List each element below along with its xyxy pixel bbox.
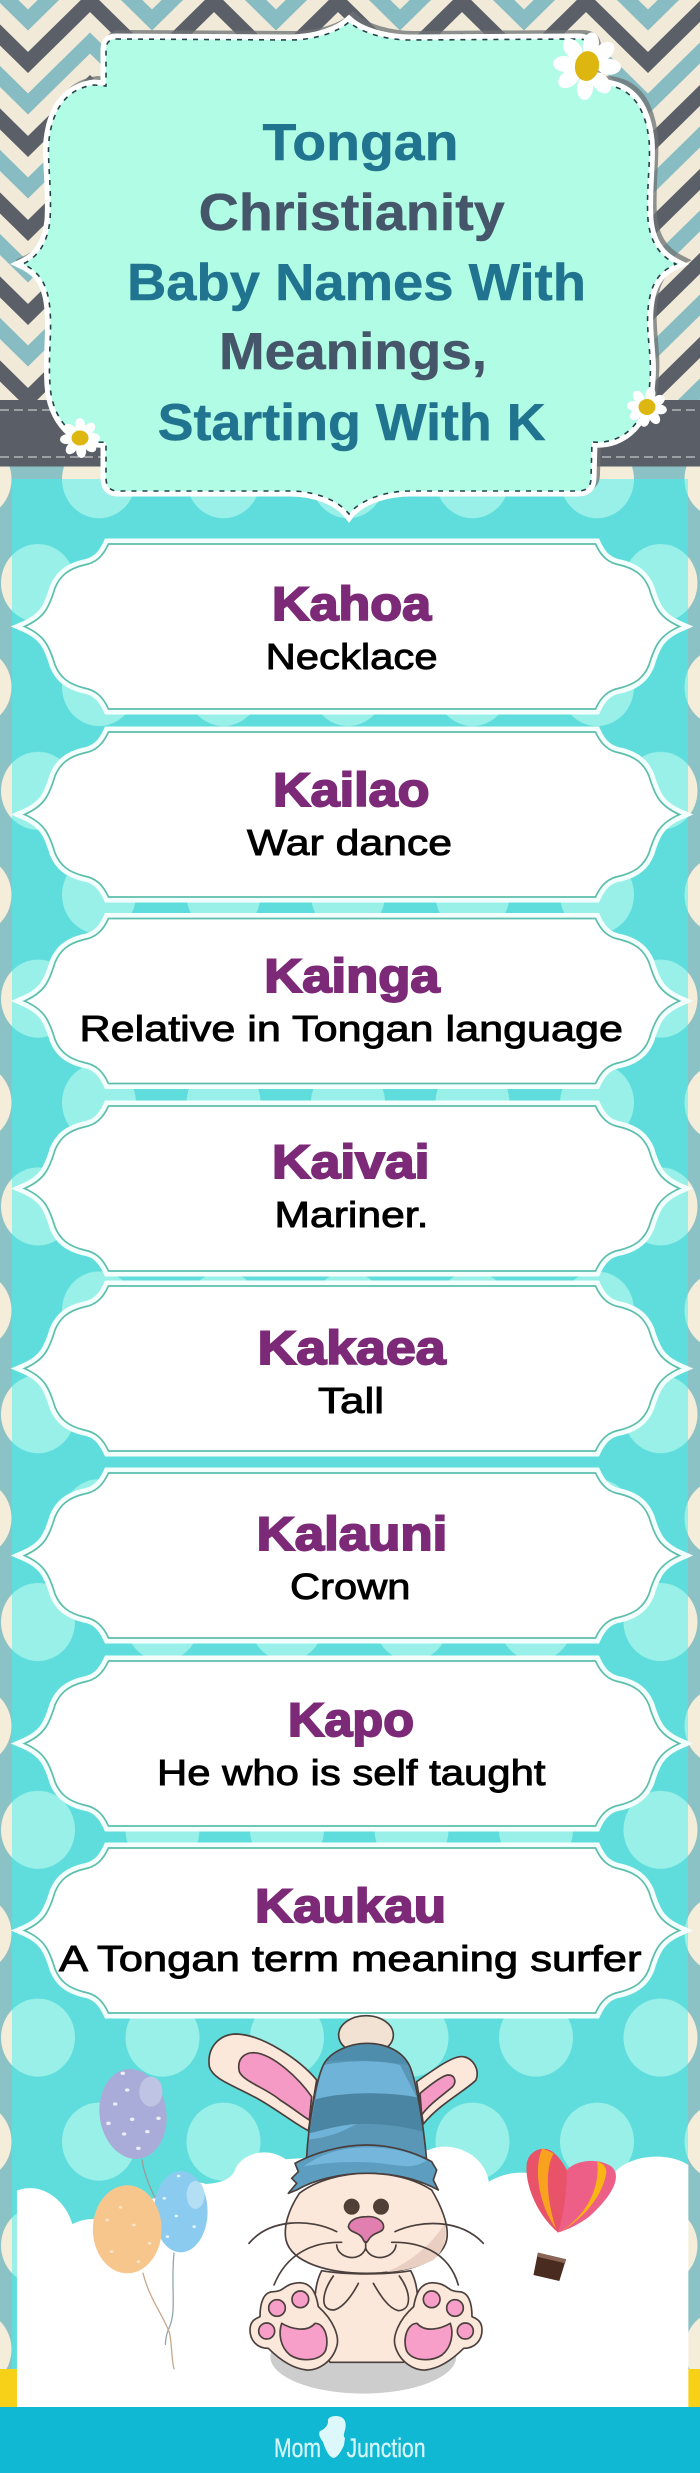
nose [348,2217,384,2242]
bunny lower: body and feet [250,2271,482,2370]
left foot [250,2283,338,2370]
name card: Kahoa [24,544,680,709]
logo: mother and child icon [319,2416,346,2458]
name card: Kaivai: Kaivai [272,1135,430,1188]
head [285,2173,447,2273]
name card: Kakaea: Tall [318,1380,384,1421]
title text: Starting With K [158,394,546,452]
left ear [209,2034,317,2131]
name card: Kailao [24,732,680,897]
icon: daisy lower right [627,386,668,428]
icon: daisy top right [552,31,621,101]
body [315,2271,418,2362]
name card: Kaivai [24,1106,680,1271]
pompom [339,2016,393,2054]
polka dot panel background [0,466,700,2407]
balloon strings [142,2159,174,2369]
title text: Baby Names With [127,254,586,312]
title text [127,114,586,452]
name card: Kainga: Relative in Tongan language [80,1008,623,1049]
hat brim [288,2145,438,2193]
name card: Kailao: War dance [247,822,452,863]
title panel [23,18,680,514]
right ear [417,2057,477,2124]
name card: Kaukau: A Tongan term meaning surfer [59,1938,642,1979]
yellow corner accents [0,2369,700,2407]
balloons [93,2067,208,2369]
icon: daisy lower left [60,418,100,458]
name card: Kalauni: Crown [290,1566,410,1607]
name card: Kapo: Kapo [288,1693,414,1746]
name card: Kaukau: Kaukau [255,1879,446,1932]
blue balloon [154,2171,208,2252]
purple balloon [95,2067,171,2161]
name card: Kapo [24,1661,680,1826]
name card: Kakaea [24,1286,680,1451]
logo wordmark: Junction [346,2433,426,2463]
name card: Kapo: He who is self taught [157,1752,546,1793]
name card: Kaukau [24,1848,680,2013]
name card: Kainga: Kainga [264,949,441,1002]
name card: Kainga [24,918,680,1084]
chevron header background [0,0,700,482]
name card: Kalauni: Kalauni [257,1507,447,1560]
logo wordmark [274,2433,426,2463]
mouth and whiskers [249,2223,483,2285]
name card: Kaivai: Mariner. [274,1194,428,1235]
white cloud scene [17,2147,688,2407]
name card: Kahoa: Necklace [266,636,438,677]
right foot [394,2283,482,2370]
bunny upper: ears, hat, head [209,2016,483,2285]
title text: Christianity [199,184,505,242]
name card: Kakaea: Kakaea [258,1321,447,1374]
title text: Meanings, [219,323,487,381]
name card: Kailao: Kailao [273,763,430,816]
eyes [344,2199,389,2215]
orange balloon [93,2185,162,2273]
logo wordmark: Mom [274,2433,321,2463]
title text: Tongan [262,114,458,172]
hot air heart balloon [526,2148,616,2281]
knitted hat [307,2043,427,2160]
name card: Kahoa: Kahoa [272,577,432,630]
stitched grey ribbon [0,400,700,466]
name card: Kalauni [24,1473,680,1638]
bunny shadow [270,2320,456,2394]
footer band [0,2407,700,2473]
